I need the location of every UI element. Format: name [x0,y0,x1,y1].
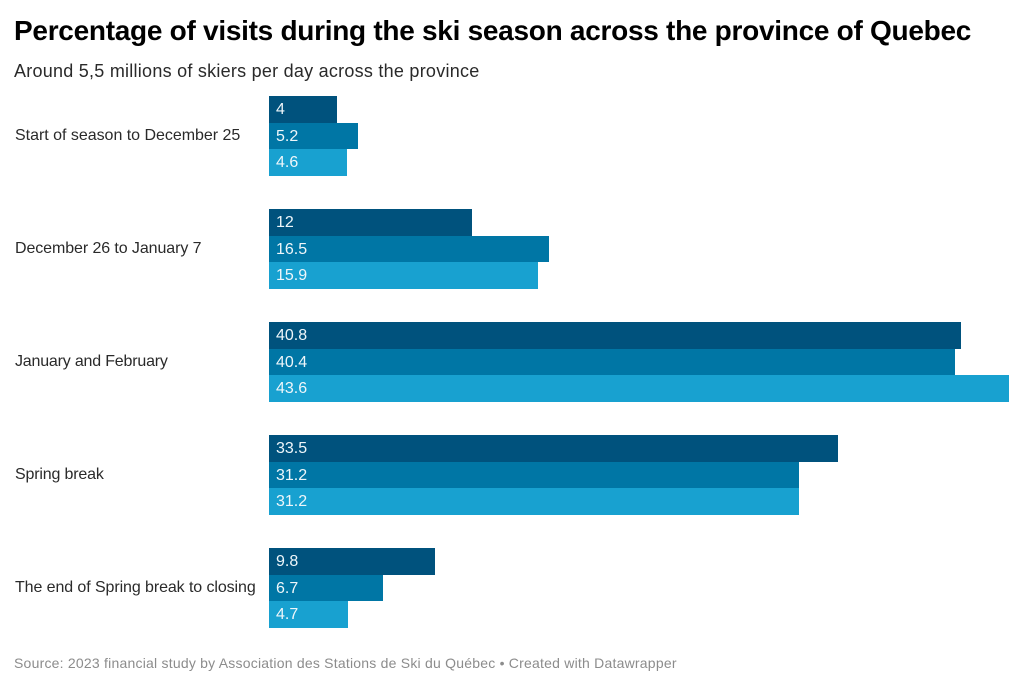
bar 33.5 [269,435,838,462]
group label: end of Spring break to closing: The end of Spring break to closing [15,579,256,596]
subtitle: Around 5,5 millions of skiers per day across the province [14,61,479,81]
bar 4.6 [269,149,347,176]
bar 12 [269,209,472,236]
bar 15.9 [269,262,538,289]
bar 6.7: 6.7 [276,580,298,597]
bar 16.5 [269,236,549,262]
bar 6.7 [269,575,383,601]
bar 40.4 [269,349,955,375]
bar 31.2 [269,488,799,515]
bar 31.2: 31.2 [276,467,307,484]
group label: January and February: January and February [15,353,168,370]
bar group: January and February [269,322,1009,402]
bar group: December 26 to January 7 [269,209,549,289]
bar 31.2: 31.2 [276,493,307,510]
bar 43.6: 43.6 [276,380,307,397]
bar 12: 12 [276,214,294,231]
bar group: Spring break [269,435,838,515]
bar group: start of season [269,96,358,176]
bar 15.9: 15.9 [276,267,307,284]
bar 4: 4 [276,101,285,118]
bar 4 [269,96,337,123]
bar 4.7: 4.7 [276,606,298,623]
group label: start of season: Start of season to December 25 [15,127,240,144]
group label: December 26 to January 7: December 26 to January 7 [15,240,201,257]
bar 40.8 [269,322,961,349]
bar 4.6: 4.6 [276,154,298,171]
bar 40.8: 40.8 [276,327,307,344]
bar 40.4: 40.4 [276,354,307,371]
bar 9.8 [269,548,435,575]
bar 4.7 [269,601,348,628]
bar 9.8: 9.8 [276,553,298,570]
title: Percentage of visits during the ski season across the province of Quebec [14,15,971,46]
bar 16.5: 16.5 [276,241,307,258]
bar 33.5: 33.5 [276,440,307,457]
group label: Spring break: Spring break [15,466,104,483]
bar 31.2 [269,462,799,488]
bar group: end of Spring break to closing [269,548,435,628]
bar 43.6 [269,375,1009,402]
source footer: Source: 2023 financial study by Association des Stations de Ski du Québec • Created with Datawrapper [14,655,677,671]
bar 5.2: 5.2 [276,128,298,145]
bar 5.2 [269,123,358,149]
